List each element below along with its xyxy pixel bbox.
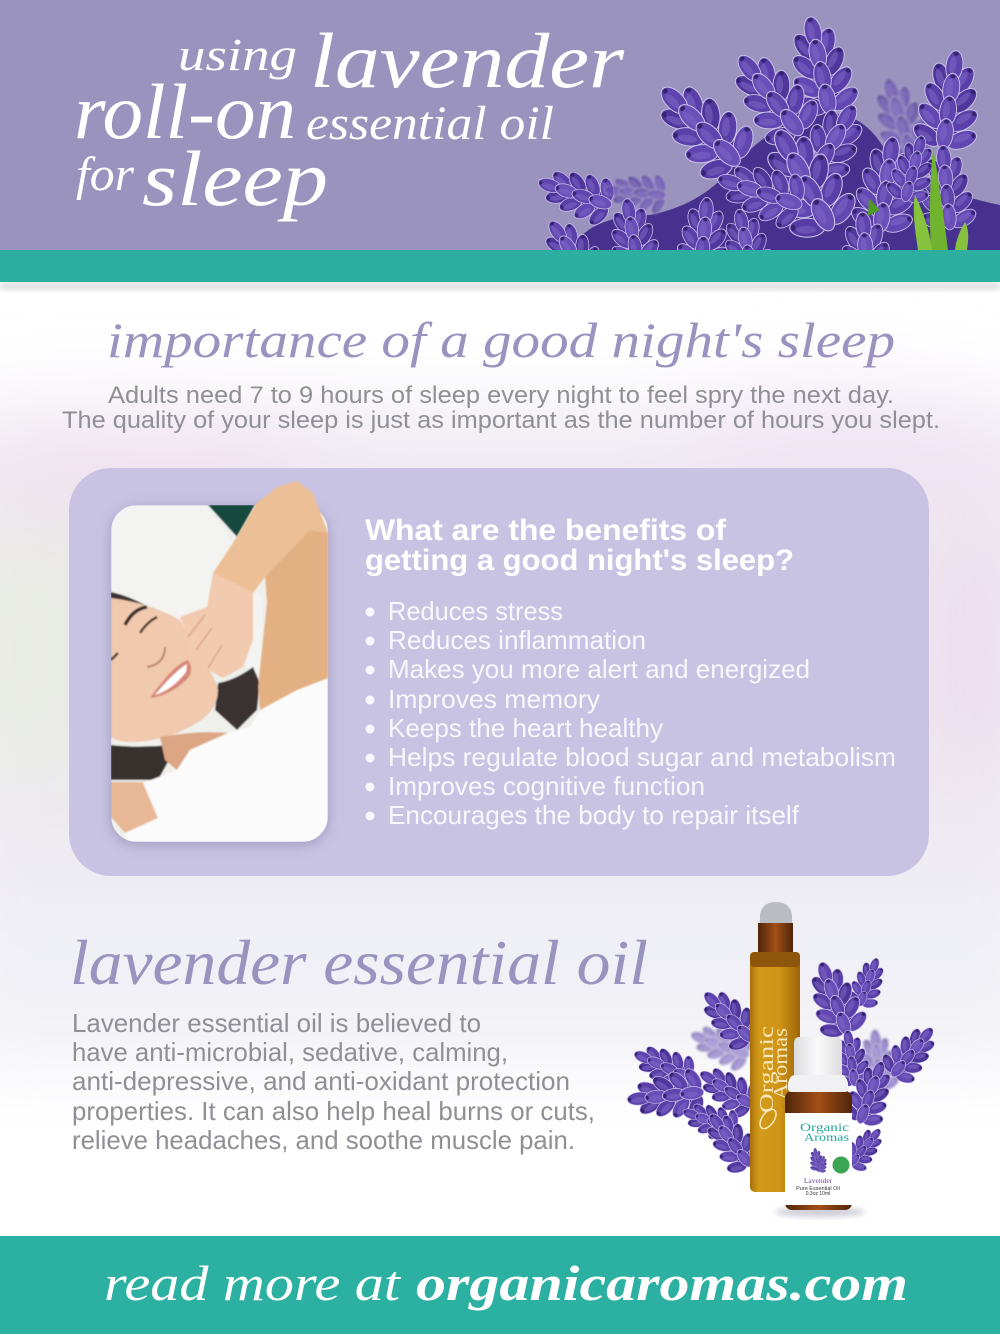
lavender description	[72, 1008, 595, 1155]
header lavender bouquet	[538, 16, 1000, 250]
header banner	[0, 0, 1000, 250]
lavender description: Lavender essential oil is believed to	[72, 1008, 481, 1038]
intro text: The quality of your sleep is just as important as the number of hours you slept.	[62, 407, 940, 434]
label product name: Lavender	[804, 1176, 833, 1185]
title: using	[178, 29, 297, 80]
small bottle	[775, 1037, 865, 1217]
heading: importance of sleep: importance of a good night's sleep	[107, 312, 895, 368]
lavender description: properties. It can also help heal burns or cuts,	[72, 1096, 595, 1126]
label brand: Organic	[800, 1122, 849, 1134]
title: sleep	[142, 135, 328, 222]
benefits list: Helps regulate blood sugar and metabolism	[388, 742, 896, 772]
panel heading: What are the benefits of	[365, 514, 727, 547]
benefits list: Reduces inflammation	[388, 625, 646, 655]
lavender behind bottles	[624, 952, 949, 1182]
footer call to action: organicaromas.com	[416, 1255, 908, 1311]
benefits list	[366, 596, 896, 830]
bottle brand text: Aromas	[770, 1028, 792, 1100]
intro text	[62, 382, 940, 434]
heading: lavender essential oil: lavender essential oil	[70, 928, 648, 998]
benefits list: Encourages the body to repair itself	[388, 800, 800, 830]
bottle logo	[757, 1107, 779, 1131]
title: roll-on	[74, 68, 296, 155]
lavender description: relieve headaches, and soothe muscle pain.	[72, 1125, 575, 1155]
label brand	[800, 1122, 850, 1144]
benefits list: Improves memory	[388, 684, 600, 714]
roll-on bottle	[750, 902, 800, 1192]
bottle brand text: Organic	[756, 1026, 778, 1113]
intro text: Adults need 7 to 9 hours of sleep every night to feel spry the next day.	[108, 382, 894, 409]
teal strip	[0, 250, 1000, 290]
benefits list: Keeps the heart healthy	[388, 713, 663, 743]
panel: benefits	[69, 468, 929, 876]
lavender description: have anti-microbial, sedative, calming,	[72, 1037, 508, 1067]
label sprig	[807, 1147, 850, 1174]
lavender description: anti-depressive, and anti-oxidant protection	[72, 1066, 570, 1096]
label product name: Pure Essential Oil	[796, 1186, 840, 1192]
title: essential oil	[306, 97, 554, 150]
title: for	[76, 148, 134, 201]
product group with lavender	[624, 902, 949, 1217]
label product name: 0.3oz 10ml	[806, 1191, 830, 1197]
title	[74, 17, 625, 222]
bottle brand text	[756, 1026, 792, 1113]
arm and hand	[180, 481, 328, 710]
footer call to action	[104, 1255, 908, 1311]
benefits list: Improves cognitive function	[388, 771, 705, 801]
panel heading: getting a good night's sleep?	[365, 544, 794, 577]
benefits list: Reduces stress	[388, 596, 563, 626]
green leaves	[868, 148, 968, 250]
footer call to action: read more at	[104, 1255, 401, 1311]
panel heading	[365, 514, 794, 577]
photo: smiling woman	[111, 481, 328, 842]
footer band	[0, 1236, 1000, 1334]
benefits list: Makes you more alert and energized	[388, 654, 810, 684]
label product name	[796, 1176, 840, 1197]
label brand: Aromas	[804, 1132, 850, 1144]
title: lavender	[310, 17, 625, 104]
